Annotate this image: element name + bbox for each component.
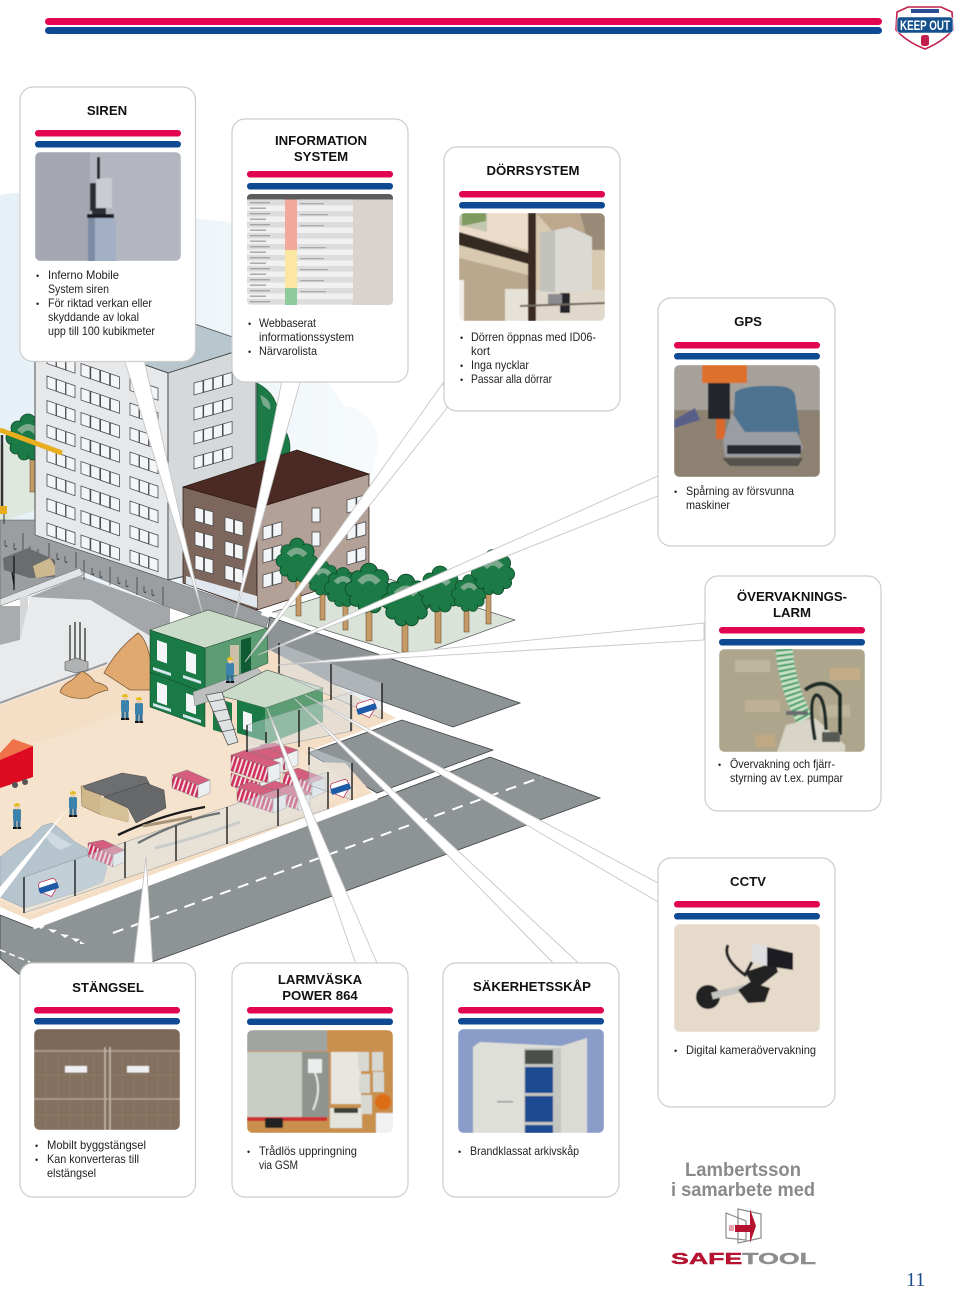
- pallets: [88, 743, 325, 867]
- pallet single: [172, 770, 210, 798]
- text: larmväska: [247, 1144, 357, 1172]
- pallet centre: [262, 781, 312, 811]
- text: övervakningslarm: styrning av t.ex. pumpar: [730, 771, 843, 785]
- pallet middle: [247, 746, 285, 775]
- tree behind low building: [257, 383, 290, 470]
- text: gps: Spårning av försvunna: [686, 484, 794, 498]
- heading: siren: SIREN: [87, 103, 127, 118]
- photo: siren on tube: [35, 152, 181, 263]
- logo: safetool: [671, 1209, 816, 1268]
- tree plaza: [262, 577, 515, 660]
- text: stängsel: Kan konverteras till: [47, 1152, 139, 1166]
- text: dörrsystem: •: [460, 333, 463, 343]
- sand ground: [0, 645, 396, 927]
- text: siren: [36, 268, 155, 338]
- heading: stängsel: STÄNGSEL: [72, 980, 144, 995]
- text: dörrsystem: Inga nycklar: [471, 358, 529, 372]
- text: dörrsystem: kort: [471, 344, 491, 358]
- panel: information system: [232, 119, 408, 382]
- pallet back: [260, 743, 298, 770]
- heading: dörrsystem: DÖRRSYSTEM: [486, 163, 580, 178]
- photo: fence: [34, 1029, 180, 1130]
- trees: [276, 538, 515, 652]
- containers: [150, 610, 323, 745]
- pointer: siren: [123, 355, 202, 612]
- top rule bars: [45, 18, 882, 34]
- fence posts: [24, 643, 382, 913]
- rebar cage: [65, 622, 88, 673]
- panel: siren: [20, 87, 196, 362]
- text: övervakningslarm: Övervakning och fjärr-: [730, 757, 835, 771]
- photo: door unit: [459, 213, 605, 321]
- text: dörrsystem: [460, 330, 596, 386]
- text: larmväska: •: [247, 1147, 250, 1157]
- heading: information system: SYSTEM: [294, 149, 348, 164]
- text: stängsel: Mobilt byggstängsel: [47, 1138, 146, 1152]
- panel: gps: [658, 298, 835, 546]
- pointer: övervakningslarm: [278, 623, 704, 665]
- workers: [13, 657, 234, 829]
- photo: fire cabinet: [458, 1029, 604, 1133]
- bars: övervakningslarm: [719, 627, 865, 646]
- bars: siren: [35, 130, 181, 148]
- photo: tracked machine: [674, 365, 820, 477]
- panel: säkerhetsskåp: [443, 963, 619, 1197]
- road: upper: [262, 617, 520, 727]
- text: gps: [674, 484, 794, 512]
- pallet front: [237, 782, 286, 813]
- street and pit ground: [0, 520, 270, 705]
- heading: information system: INFORMATION: [275, 133, 367, 148]
- photo: pump with hose: [719, 649, 865, 752]
- panel: larmväska: [232, 963, 408, 1197]
- wordmark: safetool: SAFE TOOL: [671, 1251, 816, 1268]
- pointer: stängsel: [133, 857, 153, 970]
- text: information system: Närvarolista: [259, 344, 317, 358]
- text: gps: •: [674, 487, 677, 497]
- text: cctv: •: [674, 1046, 677, 1056]
- road: middle: [308, 720, 493, 793]
- heading: larmväska: POWER 864: [282, 988, 358, 1003]
- text: information system: [248, 316, 354, 358]
- text: siren: skyddande av lokal: [48, 310, 139, 324]
- heading: övervakningslarm: [737, 589, 847, 620]
- text: stängsel: elstängsel: [47, 1166, 96, 1180]
- illustration: construction site: [0, 192, 600, 975]
- pointer: dörrsystem: [245, 383, 447, 662]
- partnership text: Lambertsson: [685, 1160, 801, 1181]
- fence panels: [24, 643, 382, 913]
- text: övervakningslarm: [718, 757, 843, 785]
- pointer: cctv: [305, 695, 658, 902]
- pointer: säkerhetsskåp: [295, 699, 586, 970]
- road: main with centre line: [0, 757, 600, 975]
- heading: övervakningslarm: LARM: [773, 605, 811, 620]
- panel: cctv: [658, 858, 835, 1107]
- tall building plinth rebars: [5, 533, 163, 605]
- pointer: fence corner: [0, 808, 68, 898]
- bars: larmväska: [247, 1007, 393, 1025]
- text: siren: För riktad verkan eller: [48, 296, 152, 310]
- text: stängsel: •: [35, 1141, 38, 1151]
- heading: gps: GPS: [734, 314, 762, 329]
- text: dörrsystem: Passar alla dörrar: [471, 372, 552, 386]
- fence signs: [37, 698, 379, 900]
- text: siren: Inferno Mobile: [48, 268, 119, 282]
- tall building: [35, 300, 256, 580]
- bars: dörrsystem: [459, 191, 605, 208]
- text: säkerhetsskåp: Brandklassat arkivskåp: [470, 1144, 579, 1158]
- bars: gps: [674, 342, 820, 360]
- tarp and lumber on plinth: [3, 548, 55, 590]
- bars: information system: [247, 171, 393, 190]
- text: dörrsystem: •: [460, 361, 463, 371]
- text: information system: •: [248, 347, 251, 357]
- text: stängsel: [35, 1138, 146, 1180]
- pallet right: [283, 768, 325, 798]
- text: siren: System siren: [48, 282, 109, 296]
- bars: säkerhetsskåp: [458, 1007, 604, 1024]
- text: säkerhetsskåp: •: [458, 1147, 461, 1157]
- sky clouds: [0, 192, 378, 600]
- text: larmväska: Trådlös uppringning: [259, 1144, 357, 1158]
- crane: [0, 430, 62, 524]
- heading: cctv: CCTV: [730, 874, 766, 889]
- text: dörrsystem: Dörren öppnas med ID06-: [471, 330, 596, 344]
- text: dörrsystem: •: [460, 375, 463, 385]
- photo: camera: [674, 924, 820, 1032]
- rails: [118, 807, 240, 848]
- text: siren: •: [36, 299, 39, 309]
- text: cctv: Digital kameraövervakning: [686, 1043, 816, 1057]
- logo: keep out badge: [896, 7, 953, 49]
- text: larmväska: via GSM: [259, 1158, 298, 1172]
- text: gps: maskiner: [686, 498, 730, 512]
- heading: larmväska: LARMVÄSKA: [278, 972, 363, 987]
- left tree and lawn: [0, 414, 50, 522]
- heading: övervakningslarm: ÖVERVAKNINGS-: [737, 589, 847, 604]
- icon: safetool arrow: [726, 1209, 761, 1243]
- pointer: larmväska: [267, 708, 380, 970]
- panel: stängsel: [20, 963, 196, 1197]
- windows: left face: [47, 352, 158, 572]
- text: information system: informationssystem: [259, 330, 354, 344]
- panel: dörrsystem: [444, 147, 620, 411]
- panel: övervakningslarm: [705, 576, 881, 811]
- text: övervakningslarm: •: [718, 760, 721, 770]
- bars: cctv: [674, 901, 820, 920]
- screenshot: attendance table: [247, 194, 393, 305]
- red trailer: [0, 739, 33, 788]
- partnership text: [671, 1160, 815, 1201]
- photo: alarm case: [247, 1030, 393, 1133]
- text: information system: Webbaserat: [259, 316, 317, 330]
- pallet front top: [231, 750, 280, 783]
- pallet by gravel: [88, 840, 125, 867]
- partnership text: i samarbete med: [671, 1180, 815, 1201]
- sand heaps: [60, 633, 155, 698]
- text: stängsel: •: [35, 1155, 38, 1165]
- pointer: information system: [235, 375, 302, 618]
- pointer: gps: [258, 476, 658, 655]
- heading: information system: [275, 133, 367, 164]
- heading: larmväska: [278, 972, 363, 1003]
- pallet lower left: [231, 773, 280, 795]
- heading: säkerhetsskåp: SÄKERHETSSKÅP: [473, 979, 591, 994]
- text: siren: upp till 100 kubikmeter: [48, 324, 155, 338]
- text: siren: •: [36, 271, 39, 281]
- low brown building: [183, 450, 369, 610]
- tarped lumber stacks: [81, 773, 166, 823]
- page number: 11: [906, 1269, 925, 1291]
- bars: stängsel: [34, 1007, 180, 1024]
- text: information system: •: [248, 319, 251, 329]
- windows: right face: [194, 372, 232, 469]
- gravel pile: [0, 823, 107, 908]
